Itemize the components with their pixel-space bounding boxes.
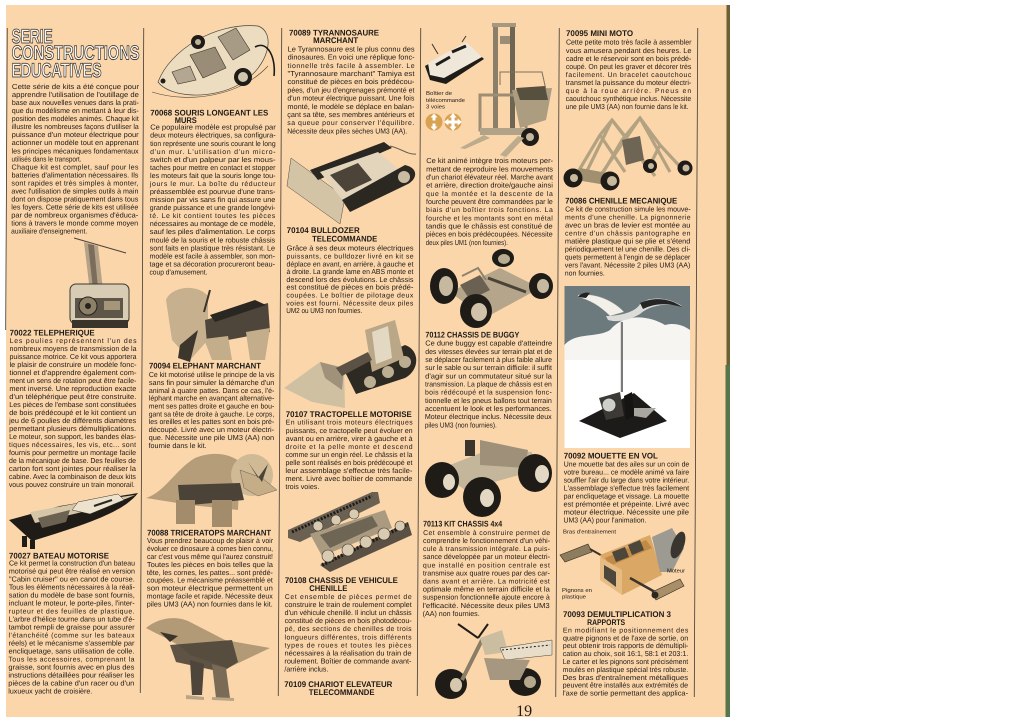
section: 70112 chassis de buggy: accentuent le look et les performances. [425, 404, 552, 413]
section: 70094 elephant marchant: 70094 ELEPHANT MARCHANT [149, 362, 261, 371]
section: 70112 chassis de buggy: Ce dune buggy est capable d'atteindre [425, 339, 552, 348]
section: 70104 bulldozer telecommande: déplace en avant, en arrière, à gauche et [286, 259, 414, 268]
section: 70027 bateau motorise: réels) et le mécanisme s'assemble par [9, 639, 135, 648]
photo: buggy [430, 249, 553, 328]
section: 70104 bulldozer telecommande: descend lors des évolutions. Le châssis [286, 275, 414, 284]
section: 70088 triceratops marchant: Toutes les pièces en bois telles que la [147, 560, 273, 569]
page number: 19 [516, 703, 532, 720]
section: 70068 souris longeant les murs: nécessaires au montage de ce modèle, [150, 219, 275, 228]
text: introduction: les foyers. Cette série de kits est utilisée [11, 202, 138, 211]
section: 70068 souris longeant les murs: sont faits en plastique très résistant. Le [150, 243, 275, 252]
section: 70068 souris longeant les murs: grande puissance et une grande longévi- [150, 203, 276, 212]
section: 70112 chassis de buggy [425, 331, 553, 429]
section: 70068 souris longeant les murs: modèle est facile à assembler, son mon- [150, 251, 276, 260]
section: 70022 telepherique: ment inversé. Une reproduction exacte [9, 384, 136, 393]
section: 70027 bateau motorise: graisse, sont fournis avec en plus des [8, 663, 135, 672]
section: 70107 tractopelle motorise: trois voies. [285, 482, 319, 491]
photo: bateau motorise [9, 493, 138, 549]
icon: two way control [426, 114, 442, 130]
section: 70104 bulldozer telecommande: voies est fourni. Nécessite deux piles [286, 300, 414, 307]
text: introduction: les principes mécaniques fondamentaux [12, 146, 139, 155]
section: 70093 demultiplication 3 rapports: peut obtenir trois rapports de démultipli- [563, 641, 689, 650]
section: 70027 bateau motorise: pièces de la cabine d'un racer ou d'un [8, 678, 134, 687]
section: 70027 bateau motorise: motorisé qui peut être réalisé en version [9, 567, 135, 576]
section: 70068 souris longeant les murs: tion représente une souris courant le long [150, 139, 276, 148]
section: 70104 bulldozer telecommande: coupées. Le boîtier de pilotage deux [286, 293, 414, 299]
section: 70027 bateau motorise [8, 551, 136, 695]
section: 70022 telepherique: nombreux moyens de transmission de la [10, 344, 137, 353]
section: 70068 souris longeant les murs: Ce populaire modèle est propulsé par [150, 123, 276, 132]
section: 70113 kit chassis 4x4: transmise aux quatre roues par des car- [423, 568, 551, 577]
section: 70022 telepherique: carton fort sont jointes pour réaliser la [9, 464, 136, 473]
label: boitier de telecommande: télécommande [426, 98, 465, 104]
section: 70068 souris longeant les murs: préassemblée est pourvue d'une trans- [150, 187, 276, 196]
icon: four way control [444, 113, 462, 131]
section: 70068 souris longeant les murs: té. Le kit contient toutes les pièces [150, 213, 276, 220]
section: 70027 bateau motorise: l'étanchéité (comme sur les bateaux [9, 633, 135, 640]
section: 70092 mouette en vol: votre bureau... ce modèle animé va faire [564, 467, 689, 476]
section: 70089 tyrannosaure marchant: "Tyrannosaure marchant" Tamiya est [287, 69, 415, 78]
section: 70095 mini moto: que à la roue arrière. Pneus en [566, 88, 691, 95]
section: 70095 mini moto: cadre et le réservoir sont en bois prédé- [566, 54, 692, 63]
section: 70086 chenille mecanique [565, 197, 691, 278]
section: 70068 souris longeant les murs: 70068 SOURIS LONGEANT LES [150, 109, 269, 117]
section: 70093 demultiplication 3 rapports: Des bras d'entraînement métalliques [563, 673, 689, 682]
section: 70088 triceratops marchant: son moteur électrique permettent un [147, 584, 273, 593]
section: 70093 demultiplication 3 rapports: peuvent être installés aux extrémités de [563, 681, 688, 690]
heading: 70109 chariot elevateur telecommande [284, 680, 392, 697]
text: introduction: par de nombreux organismes d'éduca- [11, 210, 139, 219]
section: 70027 bateau motorise: L'arbre d'hélice tourne dans un tube d'é- [9, 615, 135, 624]
section: 70112 chassis de buggy: bois rédécoupé et la suspension fonc- [425, 390, 552, 397]
photo: kit chassis 4x4 [425, 440, 552, 517]
section: 70086 chenille mecanique: non fournies. [565, 269, 605, 278]
section: 70086 chenille mecanique: vers l'avant. Nécessite 2 piles UM3 (AA) [565, 261, 690, 270]
section: 70107 tractopelle motorise: En utilisant trois moteurs électriques [286, 420, 413, 427]
section: 70088 triceratops marchant: évoluer ce dinosaure à cornes bien connu, [147, 544, 273, 553]
section: 70086 chenille mecanique: centre d'un châssis pantographe en [565, 231, 691, 238]
section: 70113 kit chassis 4x4: 70113 KIT CHASSIS 4x4 [423, 520, 503, 528]
section: 70088 triceratops marchant: 70088 TRICERATOPS MARCHANT [147, 528, 271, 537]
section: 70108 chassis de vehicule chenille: d'un véhicule chenillé. Il inclut un châssis [285, 608, 412, 617]
section: 70108 chassis de vehicule chenille [284, 576, 412, 673]
section: 70089 tyrannosaure marchant: Le Tyrannosaure est le plus connu des [288, 44, 415, 53]
section: 70104 bulldozer telecommande: à droite. La grande lame en ABS monte et [286, 267, 414, 276]
section: 70107 tractopelle motorise: ment. Livré avec boîtier de commande [285, 474, 412, 483]
section: 70112 chassis de buggy: 70112 CHASSIS DE BUGGY [425, 331, 520, 339]
title: serie constructions educatives: SERIE [12, 26, 53, 48]
title: serie constructions educatives [11, 26, 140, 82]
section: 70086 chenille mecanique: ments d'une chenille. La pignonnerie [565, 215, 691, 222]
section: 70108 chassis de vehicule chenille: Cet ensemble de pièces permet de [285, 594, 412, 601]
section: 70092 mouette en vol: est prémontée et prépeinte. Livré avec [564, 499, 689, 508]
section: 70108 chassis de vehicule chenille: constitué de pièces en bois photodécou- [285, 616, 412, 625]
section: 70092 mouette en vol: UM3 (AA) pour l'animation. [563, 515, 647, 524]
text: chariot elevateur description: fourche et les montants sont en métal [426, 215, 553, 222]
section: 70088 triceratops marchant: car c'est vous même qui l'aurez construit! [147, 552, 273, 561]
section: 70068 souris longeant les murs: moulé de la souris et le robuste châssis [150, 235, 276, 244]
label: pignons en plastique: plastique [562, 595, 586, 601]
section: 70022 telepherique: cabine. Avec la combinaison de deux kits [9, 472, 136, 481]
section: 70022 telepherique: Les poulies représentent l'un des [10, 338, 137, 345]
text: introduction: actionner un modèle tout en apprenant [12, 138, 139, 147]
section: 70094 elephant marchant: découpé. Livré avec un moteur électri- [149, 425, 275, 434]
section: 70112 chassis de buggy: des vitesses élevées sur terrain plat et de [425, 347, 552, 356]
text: chariot elevateur description: biais d'un boîtier trois fonctions. La [426, 207, 553, 214]
text: chariot elevateur description: et arrière, direction droite/gauche ainsi [426, 181, 553, 190]
section: 70068 souris longeant les murs: coup d'amusement. [149, 267, 207, 276]
section: 70113 kit chassis 4x4: suspension fonctionnelle ajoute encore à [423, 593, 550, 602]
section: 70094 elephant marchant: léphant marche en avançant alternative- [149, 394, 275, 403]
section: 70086 chenille mecanique: Ce kit de construction simule les mouve- [565, 205, 691, 214]
section: 70088 triceratops marchant: coupées. Le mécanisme préassemblé et [147, 576, 273, 585]
section: 70027 bateau motorise: encliquetage, sans utilisation de colle. [8, 647, 135, 656]
text: introduction: que du modélisme en mettant à leur dis- [12, 106, 139, 115]
text: introduction: tions à travers le monde comme moyen [11, 218, 138, 227]
section: 70113 kit chassis 4x4: optimale même en terrain difficile et la [423, 585, 550, 594]
section: 70022 telepherique: tiques nécessaires, les vis, etc... sont [9, 442, 136, 449]
section: 70022 telepherique: Les pièces de l'embase sont constituées [9, 400, 137, 409]
section: 70088 triceratops marchant [147, 528, 274, 608]
section: 70095 mini moto: transmet la puissance du moteur électri- [566, 78, 692, 87]
section: 70089 tyrannosaure marchant: 70089 TYRANNOSAURE [289, 29, 380, 37]
text: chariot elevateur description: que la montée et la descente de la [426, 191, 553, 198]
section: 70104 bulldozer telecommande: Grâce à ses deux moteurs électriques [287, 244, 414, 253]
heading: 70109 chariot elevateur telecommande: TELECOMMANDE [309, 688, 375, 697]
section: 70068 souris longeant les murs [148, 109, 277, 276]
section: 70089 tyrannosaure marchant: MARCHANT [313, 36, 358, 45]
heading: 70109 chariot elevateur telecommande: 70109 CHARIOT ELEVATEUR [284, 680, 392, 689]
section: 70068 souris longeant les murs: d'un mur. L'utilisation d'un micro- [150, 149, 276, 156]
section: 70092 mouette en vol [563, 452, 690, 524]
section: 70092 mouette en vol: Une mouette bat des ailes sur un coin de [564, 459, 689, 468]
photo: elephant marchant [166, 288, 270, 362]
page background panel [6, 5, 730, 717]
label: pignons en plastique: Pignons en [562, 588, 592, 594]
section: 70112 chassis de buggy: piles UM3 (non fournies). [425, 420, 497, 429]
section: 70092 mouette en vol: moteur électrique. Nécessite une pile [563, 507, 689, 516]
section: 70094 elephant marchant: ment ses pattes droite et gauche en bou- [149, 402, 275, 410]
section: 70107 tractopelle motorise [285, 410, 413, 491]
section: 70104 bulldozer telecommande [286, 226, 414, 315]
section: 70068 souris longeant les murs: les moteurs fait que la souris longe tou- [150, 171, 276, 180]
section: 70027 bateau motorise: luxueux yacht de croisière. [8, 686, 92, 695]
photo: mini moto [435, 624, 552, 699]
section: 70095 mini moto: 70095 MINI MOTO [566, 29, 634, 38]
section: 70113 kit chassis 4x4: Cet ensemble à construire permet de [423, 530, 550, 537]
text: introduction: auxiliaire d'enseignement. [11, 227, 87, 235]
photo: chenille mecanique [564, 118, 692, 190]
text: introduction: base aux nouvelles venues dans la prati- [12, 98, 139, 107]
section: 70094 elephant marchant: que. Nécessite une pile UM3 (AA) non [149, 433, 274, 442]
section: 70092 mouette en vol: par encliquetage et vissage. La mouette [564, 491, 689, 500]
section: 70112 chassis de buggy: Moteur électrique inclus. Nécessite deux [425, 412, 552, 421]
section: 70094 elephant marchant: les oreilles et les pattes sont en bois pré- [149, 417, 275, 426]
label: pignons en plastique [562, 588, 592, 601]
photo: tractopelle [284, 320, 416, 408]
text: introduction: sont rapides et très simples à monter, [11, 178, 138, 187]
photo: boitier telecommande [425, 36, 484, 84]
section: 70093 demultiplication 3 rapports: 70093 DEMULTIPLICATION 3 [563, 610, 671, 619]
section: 70094 elephant marchant: gant sa tête de droite à gauche. Le corps, [149, 409, 274, 418]
section: 70022 telepherique: jeu de 6 poulies de différents diamètres [8, 416, 137, 425]
column rules [4, 28, 698, 697]
text: introduction: avec l'utilisation de simples outils à main [11, 186, 138, 195]
section: 70112 chassis de buggy: tionnelle et les pneus ballons tout terrain [425, 396, 552, 405]
section: 70104 bulldozer telecommande: UM2 ou UM3 non fournies. [286, 306, 362, 315]
section: 70113 kit chassis 4x4: dans avant et arrière. La motricité est [423, 579, 550, 586]
section: 70022 telepherique: ment un sens de rotation peut être facile- [9, 376, 137, 385]
section: 70027 bateau motorise: rupteur et des feuilles de plastique. [9, 609, 135, 616]
section: 70089 tyrannosaure marchant: tionnelle très facile à assembler. Le [288, 63, 415, 70]
section: 70068 souris longeant les murs: taches pour mettre en contact et stopper [150, 163, 276, 172]
label: bras d'entrainement: Bras d'entraînement [563, 530, 616, 536]
section: 70022 telepherique: le plaisir de construire un modèle fonc- [9, 360, 137, 369]
section: 70068 souris longeant les murs: deux moteurs électriques, sa configura- [150, 131, 276, 140]
section: 70112 chassis de buggy: d'agir sur un commutateur situé sur la [425, 371, 552, 380]
text: introduction: Chaque kit est complet, sauf pour les [12, 162, 139, 171]
photo: triceratops marchant [146, 454, 277, 527]
section: 70089 tyrannosaure marchant: constitué de pièces en bois prédécou- [287, 77, 415, 86]
section: 70089 tyrannosaure marchant [287, 29, 415, 135]
section: 70094 elephant marchant [149, 362, 275, 450]
photo: tyrannosaure [146, 618, 270, 701]
section: 70113 kit chassis 4x4: comprendre le fonctionnement d'un véhi- [423, 536, 551, 545]
section: 70108 chassis de vehicule chenille: pé, des sections de chenilles de trois [285, 626, 412, 633]
section: 70107 tractopelle motorise: puissants, ce tractopelle peut évoluer en [286, 426, 413, 435]
section: 70089 tyrannosaure marchant: Nécessite deux piles sèches UM3 (AA). [287, 126, 407, 135]
section: 70068 souris longeant les murs: switch et d'un palpeur par les mous- [150, 155, 276, 164]
text: chariot elevateur description [426, 156, 554, 247]
section: 70113 kit chassis 4x4: cule à transmission intégrale. La puis- [423, 546, 550, 553]
section: 70027 bateau motorise: tambot rempli de graisse pour assurer [9, 623, 135, 632]
section: 70104 bulldozer telecommande: est constitué de pièces en bois prédé- [286, 283, 414, 292]
section: 70092 mouette en vol: 70092 MOUETTE EN VOL [564, 452, 658, 460]
title: serie constructions educatives: CONSTRUCTIONS [12, 43, 140, 64]
section: 70108 chassis de vehicule chenille: types de roues et toutes les pièces [285, 642, 412, 649]
section: 70104 bulldozer telecommande: puissants, ce bulldozer livré en kit se [287, 254, 414, 260]
section: 70022 telepherique [8, 329, 137, 489]
text: introduction: apprendre l'utilisation de l'outillage de [12, 90, 139, 99]
section: 70088 triceratops marchant: montage facile et rapide. Nécessite deux [147, 592, 273, 600]
section: 70027 bateau motorise: instructions détaillées pour réaliser les [8, 670, 135, 679]
label: moteur: Moteur [667, 569, 685, 575]
section: 70113 kit chassis 4x4: que installé en position centrale est [423, 562, 550, 569]
section: 70089 tyrannosaure marchant: d'un moteur électrique puissant. Une fois [287, 94, 415, 103]
text: chariot elevateur description: d'un chariot élévateur réel. Marche avant [426, 173, 553, 181]
photo: mouette en vol [564, 286, 690, 448]
section: 70095 mini moto: vous amusera pendant des heures. Le [566, 46, 691, 55]
section: 70022 telepherique: de la mécanique de base. Des feuilles de [9, 456, 136, 465]
section: 70093 demultiplication 3 rapports: RAPPORTS [587, 618, 626, 627]
section: 70108 chassis de vehicule chenille: nécessaires à la réalisation du train de [284, 648, 412, 657]
section: 70027 bateau motorise: incluant le moteur, le porte-piles, l'inter- [9, 599, 135, 608]
section: 70112 chassis de buggy: se déplacer facilement à plus faible allure [425, 355, 552, 364]
section: 70088 triceratops marchant: tête, les cornes, les pattes... sont prédé- [147, 568, 274, 577]
section: 70068 souris longeant les murs: MURS [175, 116, 197, 125]
section: 70095 mini moto: Cette petite moto très facile à assembler [566, 38, 692, 47]
section: 70022 telepherique: Le moteur, son support, les bandes élas- [9, 432, 137, 441]
section: 70022 telepherique: de bois prédécoupé et le kit contient un [9, 408, 136, 417]
section: 70027 bateau motorise: "Cabin cruiser" ou en canot de course. [9, 575, 135, 584]
section: 70095 mini moto: facilement. Un bracelet caoutchouc [566, 72, 692, 79]
section: 70108 chassis de vehicule chenille: roulement. Boîtier de commande avant- [284, 656, 412, 665]
text: introduction: utilisés dans le transport. [12, 154, 82, 163]
title: serie constructions educatives: EDUCATIVES [11, 60, 102, 82]
section: 70027 bateau motorise: sation du modèle de base sont fournis, [9, 591, 135, 600]
section: 70095 mini moto [566, 29, 692, 111]
section: 70108 chassis de vehicule chenille: construire le train de roulement complet [285, 600, 412, 609]
section: 70022 telepherique: tionnel et d'apprendre également com- [9, 368, 137, 377]
section: 70095 mini moto: caoutchouc synthétique inclus. Nécessite [566, 94, 691, 103]
section: 70022 telepherique: vous pouvez construire un train monorail. [9, 480, 135, 489]
section: 70093 demultiplication 3 rapports: moulés en plastique spécial très robuste. [563, 665, 688, 674]
section: 70068 souris longeant les murs: tage et sa décoration procureront beau- [149, 259, 276, 268]
section: 70086 chenille mecanique: matière plastique qui se plie et s'étend [565, 237, 690, 246]
label: boitier de telecommande [426, 91, 465, 111]
text: chariot elevateur description: tandis que le châssis est constitué de [426, 222, 553, 230]
section: 70113 kit chassis 4x4 [423, 520, 551, 618]
section: 70027 bateau motorise: 70027 BATEAU MOTORISE [9, 551, 110, 560]
section: 70093 demultiplication 3 rapports [563, 610, 689, 698]
label: boitier de telecommande: 3 voies [426, 105, 445, 111]
section: 70068 souris longeant les murs: jours le mur. La boîte du réducteur [149, 181, 276, 188]
section: 70104 bulldozer telecommande: TELECOMMANDE [312, 235, 378, 244]
text: introduction: Cette série de kits a été conçue pour [12, 82, 140, 91]
section: 70093 demultiplication 3 rapports: En modifiant le positionnement des [563, 627, 689, 634]
section: 70095 mini moto: une pile UM3 (AA) non fournie dans le kit. [566, 102, 689, 111]
section: 70086 chenille mecanique: périodiquement tel une chenille. Des cli- [565, 245, 691, 254]
section: 70089 tyrannosaure marchant: dinosaures. En voici une réplique fonc- [288, 53, 415, 62]
section: 70094 elephant marchant: fournie dans le kit. [149, 441, 207, 450]
section: 70088 triceratops marchant: Vous prendrez beaucoup de plaisir à voir [147, 536, 274, 545]
section: 70022 telepherique: fournis pour permettre un montage facile [9, 448, 136, 457]
section: 70095 mini moto: coupé. On peut les graver et décorer très [566, 62, 692, 71]
section: 70089 tyrannosaure marchant: monté, le modèle se déplace en balan- [287, 102, 415, 111]
section: 70086 chenille mecanique: 70086 CHENILLE MECANIQUE [565, 197, 678, 206]
text: introduction: puissance d'un moteur électrique pour [12, 130, 139, 139]
photo: souris longeant les murs [152, 26, 274, 97]
section: 70113 kit chassis 4x4: sance développée par un moteur électri- [423, 552, 551, 561]
text: chariot elevateur description: Ce kit animé intègre trois moteurs per- [426, 156, 554, 165]
photo: chariot elevateur [460, 23, 552, 157]
section: 70107 tractopelle motorise: droite et la pelle monte et descend [286, 444, 413, 451]
text: introduction: illustre les nombreuses façons d'utiliser la [12, 122, 139, 131]
section: 70108 chassis de vehicule chenille: 70108 CHASSIS DE VEHICULE [285, 576, 398, 585]
label: boitier de telecommande: Boîtier de [426, 91, 452, 97]
section: 70112 chassis de buggy: transmission. La plaque de châssis est en [425, 380, 552, 388]
section: 70107 tractopelle motorise: 70107 TRACTOPELLE MOTORISE [286, 410, 412, 419]
section: 70107 tractopelle motorise: pelle sont réalisés en bois prédécoupé et [285, 458, 413, 467]
section: 70086 chenille mecanique: quets permettent à l'engin de se déplacer [565, 253, 691, 262]
section: 70093 demultiplication 3 rapports: l'axe de sortie permettant des applica- [563, 689, 689, 698]
section: 70094 elephant marchant: animal à quatre pattes. Dans ce cas, l'é- [149, 386, 275, 395]
text: chariot elevateur description: deux piles UM1 (non fournies). [426, 238, 508, 247]
section: 70089 tyrannosaure marchant: pées, d'un jeu d'engrenages prémonté et [287, 85, 414, 94]
text: chariot elevateur description: pièces en bois prédécoupées. Nécessite [426, 230, 553, 239]
section: 70104 bulldozer telecommande: 70104 BULLDOZER [287, 226, 360, 235]
text: introduction: dont on dispose pratiquement dans tous [11, 194, 139, 203]
section: 70068 souris longeant les murs: mission par vis sans fin qui assure une [150, 195, 275, 204]
section: 70027 bateau motorise: Ce kit permet la construction d'un bateau [9, 559, 135, 568]
section: 70113 kit chassis 4x4: (AA) non fournies. [423, 609, 480, 618]
section: 70068 souris longeant les murs: sauf les piles d'alimentation. Le corps [150, 227, 276, 236]
section: 70022 telepherique: permettant plusieurs démultiplications. [9, 424, 136, 433]
section: 70022 telepherique: d'un téléphérique peut être construite. [9, 392, 136, 401]
section: 70027 bateau motorise: Tous les accessoires, comprenant la [8, 657, 135, 664]
section: 70108 chassis de vehicule chenille: /arrière inclus. [284, 664, 328, 673]
section: 70089 tyrannosaure marchant: sa queue pour conserver l'équilibre. [287, 120, 414, 127]
text: chariot elevateur description: mettant de reproduire les mouvements [426, 164, 553, 173]
section: 70094 elephant marchant: Ce kit motorisé utilise le principe de la vis [149, 370, 275, 379]
section: 70108 chassis de vehicule chenille: longueurs différentes, trois différents [285, 634, 412, 641]
section: 70112 chassis de buggy: sur le sable ou sur terrain difficile: il suffit [425, 363, 552, 372]
text: introduction: batteries d'alimentation nécessaires. Ils [11, 170, 139, 179]
skewed page content [4, 26, 698, 720]
photo: telepherique [70, 238, 129, 328]
text: chariot elevateur description: fourche peuvent être commandées par le [426, 197, 553, 206]
section: 70092 mouette en vol: souffler l'air du large dans votre intérieur. [564, 475, 689, 484]
section: 70094 elephant marchant: sans fin pour simuler la démarche d'un [149, 378, 274, 387]
section: 70027 bateau motorise: Tous les éléments nécessaires à la réali- [9, 583, 135, 592]
text: introduction: position des modèles animés. Chaque kit [12, 114, 139, 123]
section: 70107 tractopelle motorise: leur assemblage s'effectue très facile- [285, 466, 413, 475]
section: 70086 chenille mecanique: avec un bras de levier est montée au [565, 221, 691, 230]
section: 70088 triceratops marchant: piles UM3 (AA) non fournies dans le kit. [147, 599, 273, 608]
photo: bulldozer [287, 142, 416, 224]
section: 70022 telepherique: 70022 TELEPHERIQUE [10, 329, 95, 338]
photo: chassis chenille [288, 492, 412, 572]
section: 70093 demultiplication 3 rapports: cation au choix, soit 16:1, 58:1 et 203:1. [563, 649, 688, 658]
section: 70092 mouette en vol: L'assemblage s'effectue très facilement [564, 483, 689, 492]
section: 70089 tyrannosaure marchant: çant sa tête, ses membres antérieurs et [287, 110, 414, 119]
photo: demultiplication 3 rapports [560, 528, 688, 600]
section: 70108 chassis de vehicule chenille: CHENILLE [309, 584, 348, 593]
section: 70113 kit chassis 4x4: l'efficacité. Nécessite deux piles UM3 [423, 601, 550, 610]
section: 70107 tractopelle motorise: avant ou en arrière, virer à gauche et à [286, 434, 413, 443]
section: 70093 demultiplication 3 rapports: Le carter et les pignons sont précisément [563, 657, 688, 666]
section: 70093 demultiplication 3 rapports: quatre pignons et de l'axe de sortie, on [563, 633, 688, 642]
section: 70022 telepherique: puissance motrice. Ce kit vous apportera [10, 352, 137, 361]
section: 70107 tractopelle motorise: comme sur un engin réel. Le châssis et la [285, 450, 413, 459]
text: introduction [11, 82, 140, 236]
